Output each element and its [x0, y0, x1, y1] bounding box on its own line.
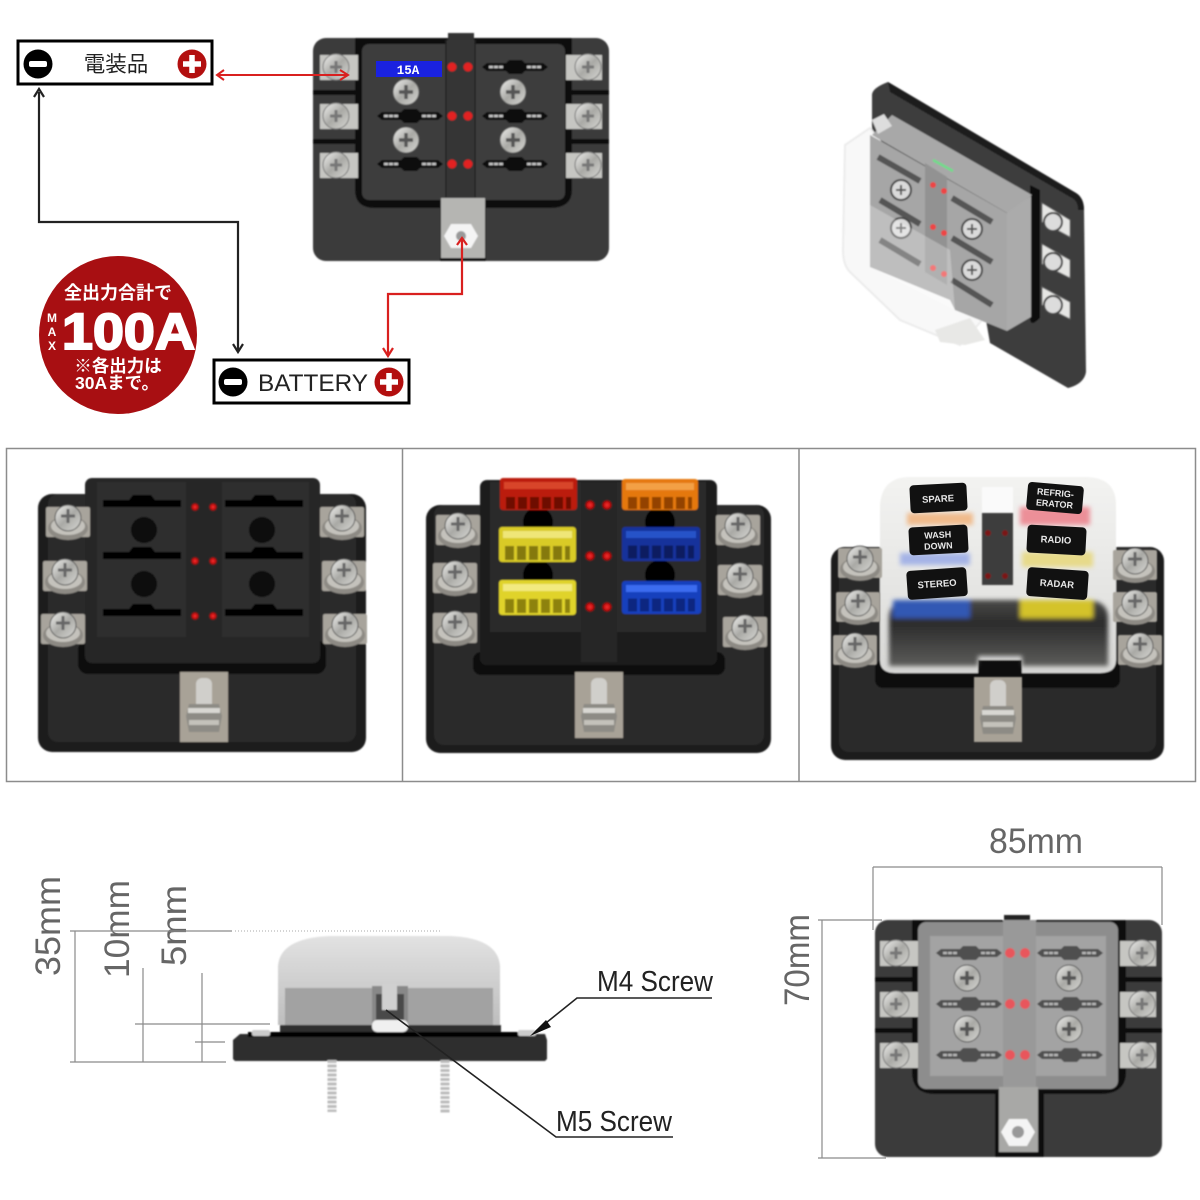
fuse: blue top — [622, 527, 700, 561]
red 100A badge: ※各出力は — [74, 356, 162, 376]
cover haze over lower left — [870, 205, 955, 310]
photo: bare fuse block — [38, 478, 367, 752]
fuse: blue bottom — [622, 581, 701, 614]
label: WASH DOWN: DOWN — [924, 540, 953, 552]
height dimension labels: 10mm — [98, 880, 137, 978]
M4 Screw callout — [530, 966, 713, 1036]
height dimension labels: 5mm — [155, 885, 194, 966]
panel frame: three product photos — [6, 448, 1196, 782]
red 100A badge: A — [48, 325, 57, 339]
label: REFRIGERATOR: ERATOR — [1036, 497, 1074, 511]
red 100A badge: X — [48, 339, 56, 353]
M4 Screw callout: M4 Screw — [597, 966, 713, 998]
dimension lines — [70, 931, 440, 1062]
dimension lines — [818, 867, 1162, 1158]
label: WASH DOWN: WASH — [924, 529, 951, 541]
M5 Screw callout: M5 Screw — [556, 1106, 672, 1138]
15A blue label — [376, 61, 442, 78]
label: WASH DOWN — [908, 524, 969, 555]
fuse: yellow top — [499, 527, 576, 562]
module top — [872, 115, 1032, 214]
BATTERY box: BATTERY — [258, 370, 368, 397]
label: REFRIGERATOR: REFRIG- — [1037, 486, 1074, 500]
panel: wiring diagram — [18, 33, 609, 414]
panel: side view dimensions — [29, 876, 713, 1138]
panel: top view dimensions — [778, 822, 1162, 1158]
fuse: yellow bottom — [499, 580, 576, 615]
width label: 85mm — [989, 822, 1083, 861]
15A blue label: 15A — [397, 64, 420, 78]
red 100A badge: 全出力合計で — [64, 283, 172, 303]
電装品 load box: 電装品 — [84, 52, 148, 76]
red 100A badge: 30Aまで。 — [75, 373, 159, 393]
red 100A badge — [39, 256, 197, 414]
fuse: orange — [622, 479, 698, 510]
red 100A badge: 100A — [62, 303, 195, 360]
M5 Screw callout — [386, 1010, 673, 1138]
arrow: red load connection — [217, 70, 348, 80]
height dimension labels: 35mm — [29, 876, 68, 976]
side view of fuse block — [233, 936, 547, 1114]
module side — [1007, 196, 1031, 331]
terminals — [1042, 203, 1070, 319]
photo: block with translucent labeled cover — [831, 477, 1164, 760]
label: RADIO — [1026, 525, 1087, 556]
label: SPARE: SPARE — [922, 493, 954, 506]
arrow: red positive connection — [383, 238, 467, 356]
label: RADAR: RADAR — [1039, 578, 1075, 591]
photo: block with colored fuses — [426, 478, 771, 753]
fuse: red — [500, 478, 577, 510]
label: REFRIGERATOR — [1026, 482, 1084, 514]
slots and screws — [878, 157, 992, 305]
label: STEREO — [906, 567, 968, 600]
red 100A badge: M — [47, 311, 57, 325]
cover colored glow bands — [889, 507, 1108, 666]
height label: 70mm — [778, 914, 817, 1006]
isometric view with transparent cover — [843, 82, 1086, 388]
transparent cover — [843, 128, 1000, 345]
label: STEREO: STEREO — [917, 578, 957, 591]
top-view fuse block diagram — [313, 33, 609, 261]
電装品 load box — [18, 41, 212, 84]
top view of fuse block under cover — [875, 915, 1162, 1157]
label: SPARE — [909, 483, 968, 513]
height dimension labels — [29, 876, 194, 978]
BATTERY box — [214, 360, 409, 403]
back plate — [872, 82, 1086, 388]
post — [935, 318, 985, 345]
arrow: black negative connection — [34, 89, 243, 352]
label: RADIO: RADIO — [1040, 534, 1072, 547]
label: RADAR — [1026, 567, 1089, 600]
module face — [870, 135, 1007, 331]
